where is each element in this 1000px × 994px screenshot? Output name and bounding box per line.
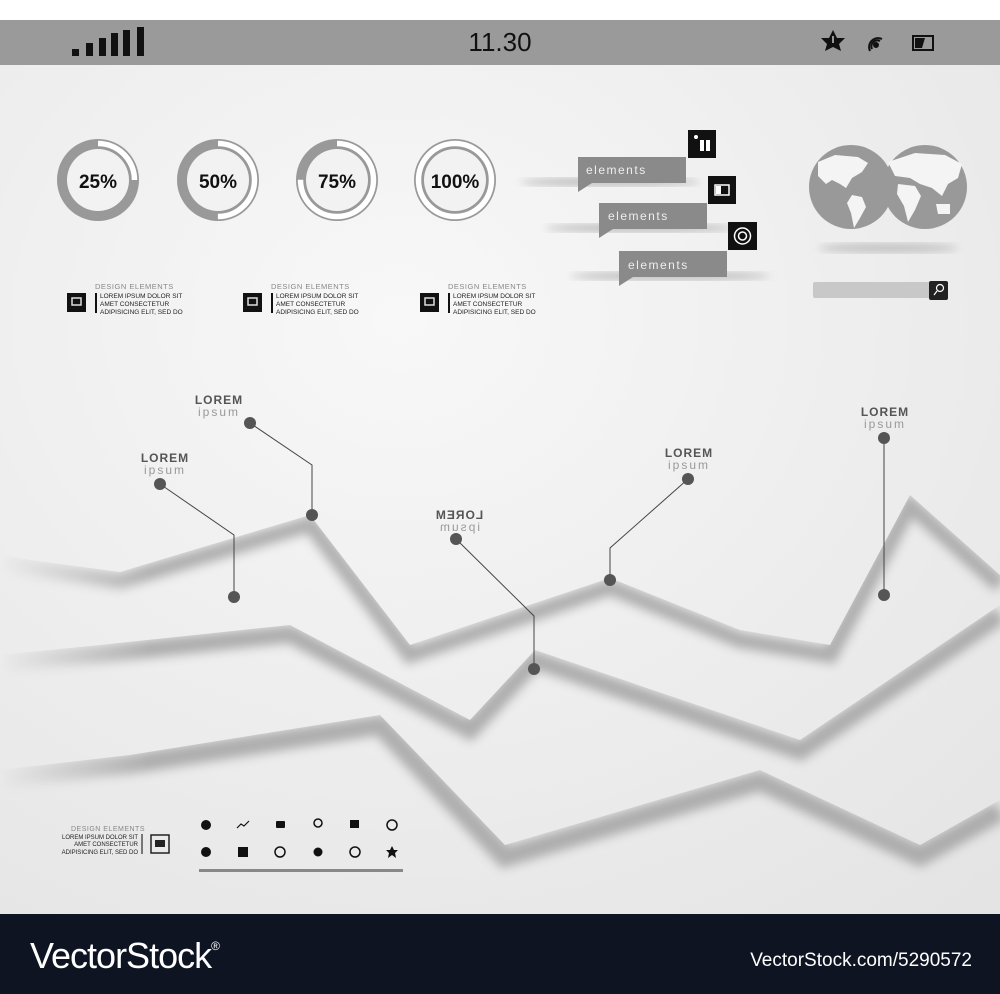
design element text blocks: AMET CONSECTETUR — [100, 301, 170, 308]
bottom design elements text — [62, 826, 169, 856]
design element text blocks: AMET CONSECTETUR — [276, 301, 346, 308]
icon: alert star — [821, 30, 845, 51]
design element text blocks — [67, 282, 536, 316]
lorem labels: ipsum — [438, 520, 480, 534]
bottom design elements text: ADIPISICING ELIT, SED DO — [62, 850, 138, 856]
icon: people — [688, 130, 716, 158]
lorem labels: LOREM — [665, 446, 713, 460]
design element text blocks: LOREM IPSUM DOLOR SIT — [100, 293, 182, 300]
donut charts — [57, 139, 496, 221]
footer: VectorStock.com/5290572 — [750, 950, 972, 971]
lorem labels — [141, 393, 909, 534]
donut charts: 75% — [318, 172, 356, 193]
icon: wifi — [869, 38, 882, 51]
icon: target — [728, 222, 757, 250]
design element text blocks: ADIPISICING ELIT, SED DO — [100, 309, 183, 316]
callout labels: elements: elements — [586, 163, 647, 177]
lorem labels: ipsum — [144, 463, 186, 477]
search bar — [813, 281, 948, 300]
donut charts: 50% — [199, 172, 237, 193]
design element text blocks: AMET CONSECTETUR — [453, 301, 523, 308]
design element text blocks: DESIGN ELEMENTS — [95, 282, 174, 291]
callout labels: elements: elements — [608, 209, 669, 223]
bottom design elements text: AMET CONSECTETUR — [74, 842, 139, 848]
world map globes — [809, 145, 967, 253]
status bar — [0, 20, 1000, 65]
lorem labels: LOREM — [861, 405, 909, 419]
icon grid — [201, 819, 398, 858]
donut charts: 25% — [79, 172, 117, 193]
icon: signal — [72, 27, 144, 56]
design element text blocks: ADIPISICING ELIT, SED DO — [453, 309, 536, 316]
design element text blocks: LOREM IPSUM DOLOR SIT — [276, 293, 358, 300]
lorem labels: ipsum — [198, 405, 240, 419]
design element text blocks: ADIPISICING ELIT, SED DO — [276, 309, 359, 316]
bottom design elements text: LOREM IPSUM DOLOR SIT — [62, 835, 138, 841]
icon: card — [708, 176, 736, 204]
footer: VectorStock — [30, 935, 211, 976]
design element text blocks: DESIGN ELEMENTS — [448, 282, 527, 291]
lorem labels: ipsum — [864, 417, 906, 431]
bottom design elements text: DESIGN ELEMENTS — [71, 826, 145, 833]
time: 11.30 — [468, 27, 532, 57]
lorem labels: LOREM — [141, 451, 189, 465]
connector lines and dots — [160, 423, 884, 669]
footer: ® — [211, 939, 220, 953]
icon: battery — [913, 36, 933, 50]
lorem labels: LOREM — [435, 508, 483, 522]
lorem labels: LOREM — [195, 393, 243, 407]
lorem labels: ipsum — [668, 458, 710, 472]
footer — [0, 914, 1000, 994]
design element text blocks: DESIGN ELEMENTS — [271, 282, 350, 291]
donut charts: 100% — [431, 172, 479, 193]
terrain layers — [0, 505, 1000, 857]
design element text blocks: LOREM IPSUM DOLOR SIT — [453, 293, 535, 300]
callout labels: elements — [520, 130, 770, 286]
callout labels: elements: elements — [628, 258, 689, 272]
